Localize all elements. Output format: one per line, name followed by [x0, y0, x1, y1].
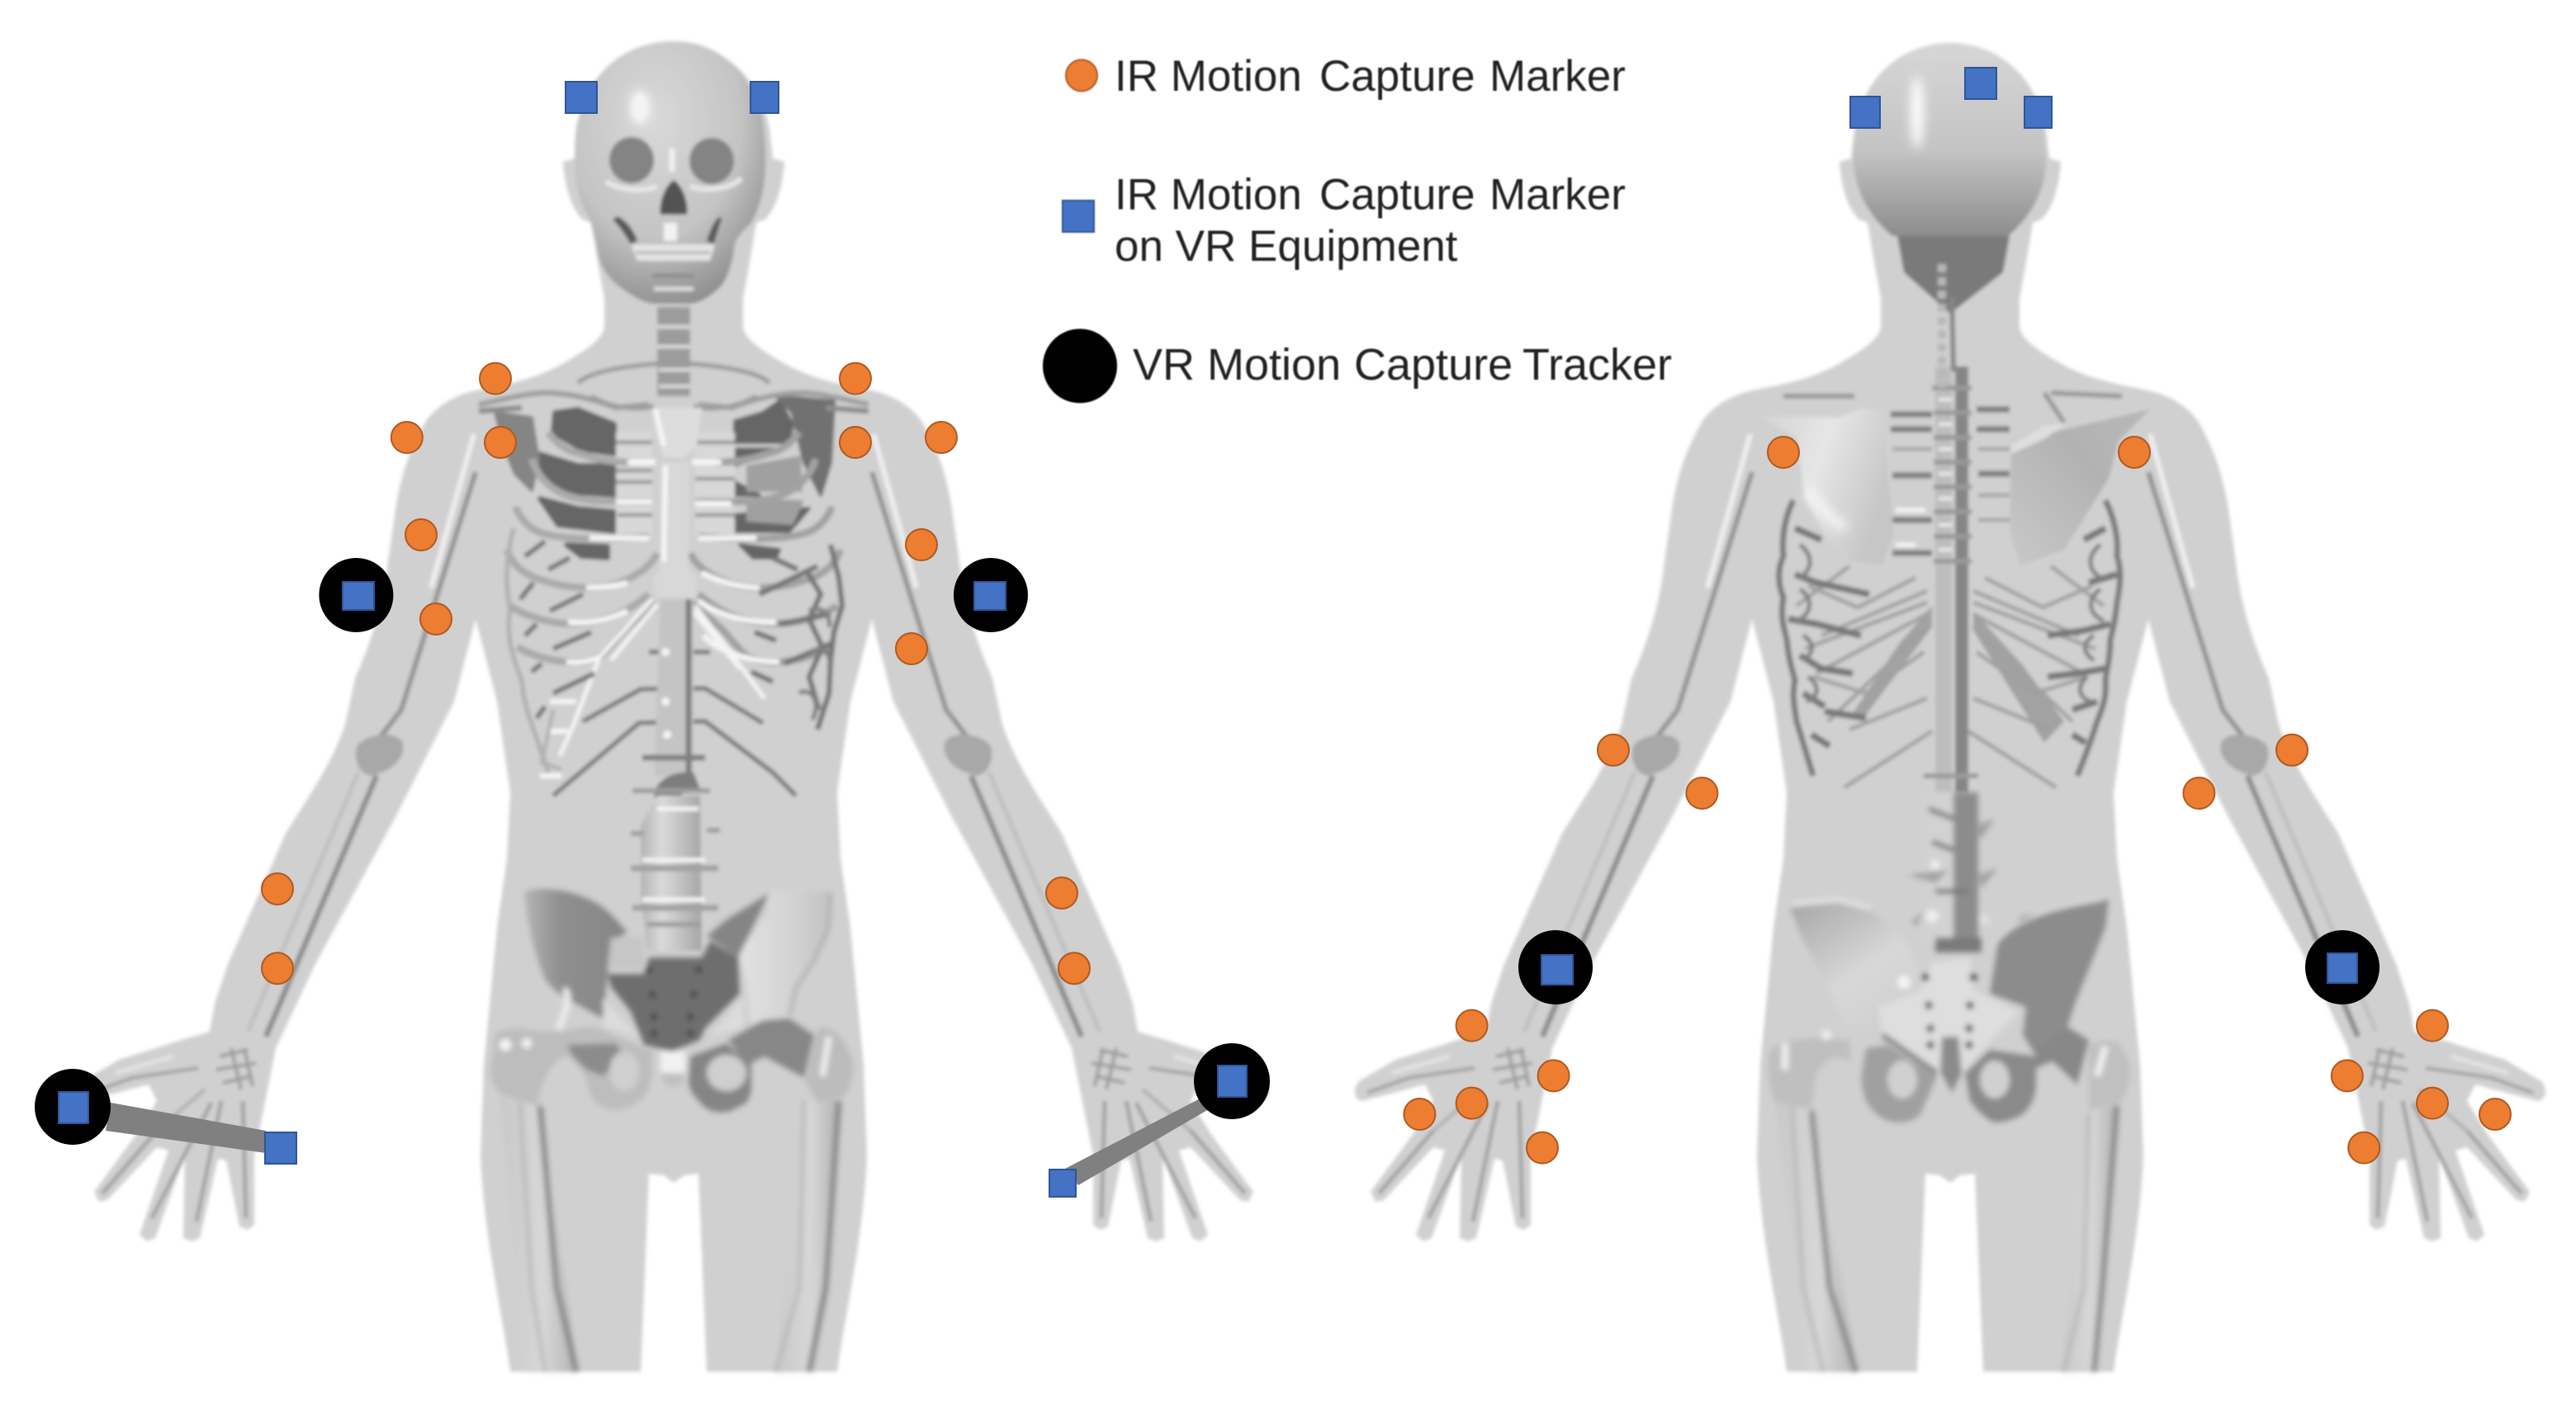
IR markers, back — [1404, 437, 2511, 1164]
legend: IR marker on VR equipment: IR Motion — [1115, 170, 1302, 219]
lateral chain right — [2077, 500, 2120, 776]
dark lung areas right — [735, 401, 809, 558]
legend: VR tracker: VR Motion — [1133, 340, 1341, 390]
trackers, front — [35, 558, 1270, 1145]
rib cage, back — [1759, 366, 2150, 792]
left iliac wing — [1790, 903, 1924, 1035]
left hip — [1769, 1038, 1851, 1109]
legend: VR tracker: Tracker — [1522, 340, 1672, 390]
legend: VR tracker — [1043, 328, 1672, 403]
arm bones, back left — [1367, 434, 1752, 1222]
head markers, back — [1850, 68, 2052, 128]
sacral block — [608, 938, 644, 969]
right ramus — [1965, 1050, 2036, 1122]
right hip — [2089, 1041, 2130, 1109]
left femur — [500, 1098, 578, 1372]
legend: IR marker: IR Motion — [1115, 52, 1302, 101]
legend: IR marker — [1066, 52, 1626, 101]
right wedge — [1973, 611, 2064, 743]
skull — [575, 41, 765, 304]
pubic symphysis — [661, 1051, 685, 1073]
clavicles — [479, 393, 869, 408]
dark lung areas left — [540, 409, 614, 558]
legend — [1043, 52, 1672, 403]
spine-side rib bars — [1891, 409, 2010, 553]
body silhouette, back right half — [1949, 43, 2545, 1372]
left wedge — [1849, 606, 1932, 718]
right hip and ramus — [728, 1018, 814, 1078]
back of neck — [1897, 236, 2010, 388]
right iliac wing — [740, 891, 831, 1023]
legend: VR tracker: Capture — [1354, 340, 1513, 390]
thoracic spine — [654, 599, 694, 776]
VR equipment squares, back — [1541, 953, 2357, 985]
VR equipment squares, front — [59, 582, 1247, 1197]
lower chevrons — [553, 652, 796, 796]
spine column — [1935, 366, 1952, 792]
left femur — [1775, 1103, 1858, 1372]
trackers, back — [1518, 930, 2379, 1004]
head markers, front — [566, 82, 779, 113]
lumbar spine, front — [631, 758, 720, 951]
arm bones, back right — [2148, 434, 2533, 1222]
ribs gray, both sides — [507, 432, 657, 663]
legend: IR marker: Marker — [1489, 52, 1626, 101]
upper rib bands — [1783, 393, 2122, 423]
IR markers, front — [262, 363, 1090, 984]
long costal cartilage right — [690, 606, 765, 698]
right iliac wing — [1990, 900, 2109, 1056]
figure: skeleton back view — [1355, 43, 2545, 1372]
right controller bar — [1065, 1096, 1209, 1185]
thin ribs left — [1797, 566, 1932, 787]
body silhouette, front right half — [672, 43, 1269, 1372]
legend: IR marker on VR equipment: on VR Equipment — [1115, 222, 1458, 271]
right femur — [776, 1101, 839, 1372]
back of head — [1854, 45, 2046, 236]
lateral rib edges left — [507, 528, 548, 773]
left hip and ramus — [490, 1027, 652, 1110]
left ramus — [1861, 1045, 1937, 1122]
rib cage, front — [479, 307, 869, 796]
light costal panels — [616, 432, 735, 536]
arm bones, front right — [872, 434, 1257, 1222]
posterior rib dashes left — [520, 541, 594, 718]
pelvis, front — [490, 889, 854, 1372]
legend: IR marker: Capture — [1319, 52, 1475, 101]
lateral chain left — [1779, 500, 1813, 776]
thin ribs right — [1968, 566, 2104, 787]
top rib ring — [578, 363, 769, 409]
markers: front view — [35, 82, 1270, 1197]
dark scapula right — [776, 396, 834, 495]
sacrum — [1878, 957, 2020, 1093]
posterior ribs right — [751, 545, 842, 730]
arm bones, front left — [91, 434, 476, 1222]
left iliac wing — [524, 889, 627, 1018]
dark scapula left — [495, 413, 538, 490]
left scapula — [1759, 408, 1894, 565]
lumbar spine, back — [1907, 792, 1998, 952]
legend: IR marker on VR equipment — [1063, 170, 1626, 271]
right scapula — [2010, 409, 2150, 566]
right femur — [2061, 1106, 2117, 1372]
pelvis, back — [1769, 900, 2130, 1372]
sternum — [652, 408, 702, 457]
long costal cartilage left — [560, 599, 657, 756]
left controller bar — [106, 1103, 266, 1153]
figure: skeleton front view — [78, 41, 1269, 1372]
body silhouette, front left half — [78, 43, 675, 1372]
white rib highlights — [566, 462, 779, 663]
legend: IR marker on VR equipment: Marker — [1489, 170, 1626, 219]
body silhouette, back left half — [1355, 43, 1952, 1372]
legend: IR marker on VR equipment: Capture — [1319, 170, 1475, 219]
cervical spine — [657, 307, 690, 396]
markers: back view — [1404, 68, 2511, 1164]
